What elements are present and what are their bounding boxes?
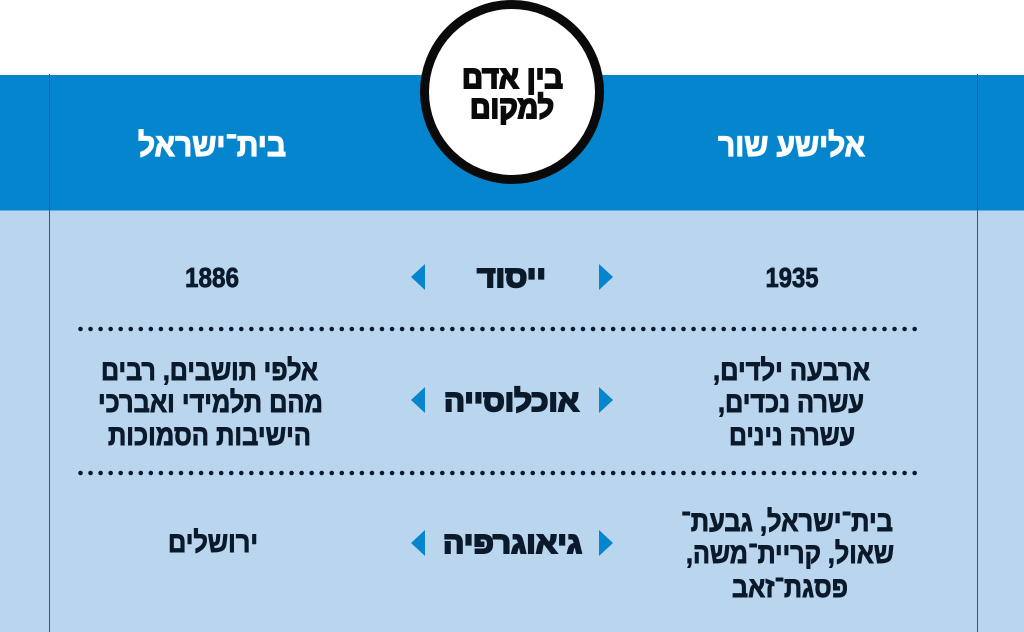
text: left column population [98, 355, 323, 452]
panel: blue header band [0, 75, 1024, 210]
row label: founding: ייסוד [477, 261, 546, 294]
heading: right column name: אלישע שור [718, 127, 865, 163]
text: right column population: עשרה נכדים, [718, 387, 864, 419]
arrow: right [599, 530, 613, 556]
arrow: right [599, 264, 613, 290]
text: right column population: עשרה נינים [729, 420, 855, 452]
text: right column geography: שאול, קריית־משה, [686, 538, 894, 570]
row: founding: 1886 [185, 262, 239, 293]
row: founding [185, 261, 818, 294]
text: right column population: ארבעה ילדים, [713, 355, 870, 387]
row label: population: אוכלוסייה [444, 385, 579, 418]
text: left column population: אלפי תושבים, רבים [101, 355, 318, 387]
text: right column population [713, 355, 870, 452]
row: founding: 1935 [766, 262, 818, 293]
text: right column geography [681, 506, 894, 604]
panel: table body background [0, 210, 1024, 632]
title badge: circle: בין אדם [462, 60, 563, 95]
row: geography [168, 506, 894, 604]
text: right column geography: בית־ישראל, גבעת־ [681, 506, 893, 538]
arrow: right [599, 387, 613, 413]
title badge: circle: למקום [470, 90, 554, 125]
arrow: left [411, 387, 425, 413]
row: population [98, 355, 870, 452]
text: left column population: מהם תלמידי ואברכי [98, 387, 323, 419]
arrow: left [411, 264, 425, 290]
title badge: circle [424, 4, 600, 180]
text: right column geography: פסגת־זאב [732, 572, 848, 604]
row label: geography: גיאוגרפיה [443, 527, 582, 560]
heading: left column name: בית־ישראל [138, 127, 286, 163]
text: left column population: הישיבות הסמוכות [108, 420, 311, 452]
text: left column geography: ירושלים [168, 527, 258, 559]
arrow: left [411, 530, 425, 556]
